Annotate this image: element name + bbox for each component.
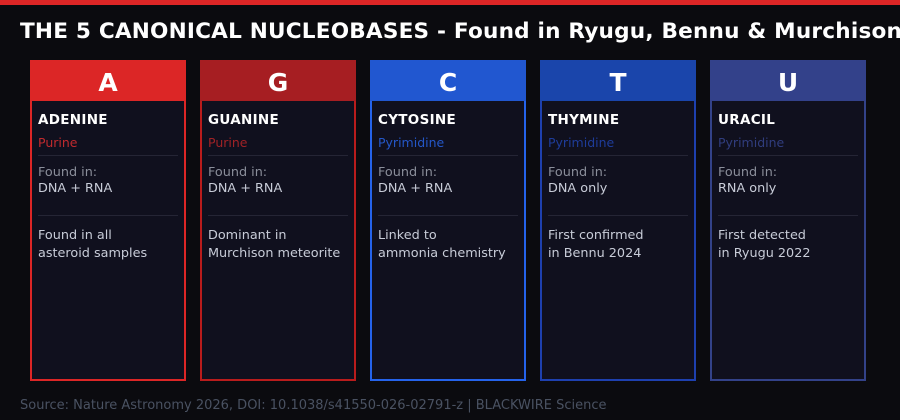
found in: Found in: [378, 165, 437, 180]
header: G [200, 60, 356, 101]
panel: cytosine [370, 60, 526, 381]
header: T: T [609, 68, 627, 97]
note: Found in all [38, 228, 112, 243]
note [378, 228, 506, 261]
header: U: U [778, 68, 798, 97]
found in: Found in: [208, 165, 267, 180]
header: A: A [98, 68, 118, 97]
found in [718, 165, 777, 196]
found in: Found in: [38, 165, 97, 180]
name: URACIL [718, 112, 775, 128]
name: THYMINE [548, 112, 619, 128]
found in: DNA + RNA [378, 181, 452, 196]
name: ADENINE [38, 112, 108, 128]
found in: DNA only [548, 181, 607, 196]
panel: guanine [200, 60, 356, 381]
type: Purine [38, 135, 77, 150]
note [548, 228, 644, 261]
note: ammonia chemistry [378, 246, 506, 261]
note: in Ryugu 2022 [718, 246, 810, 261]
header: U [710, 60, 866, 101]
found in: DNA + RNA [38, 181, 112, 196]
type: Pyrimidine [718, 135, 784, 150]
panel: uracil [710, 60, 866, 381]
header: G: G [268, 68, 288, 97]
note: First confirmed [548, 228, 644, 243]
note [718, 228, 810, 261]
found in [548, 165, 607, 196]
panel: adenine [30, 60, 186, 381]
note: Murchison meteorite [208, 246, 340, 261]
note: in Bennu 2024 [548, 246, 641, 261]
found in: Found in: [718, 165, 777, 180]
header: C [370, 60, 526, 101]
found in: Found in: [548, 165, 607, 180]
panel: thymine [540, 60, 696, 381]
note: First detected [718, 228, 806, 243]
found in: DNA + RNA [208, 181, 282, 196]
note: Dominant in [208, 228, 287, 243]
found in: RNA only [718, 181, 776, 196]
note [208, 228, 340, 261]
found in [208, 165, 282, 196]
found in [38, 165, 112, 196]
name: CYTOSINE [378, 112, 456, 128]
type: Pyrimidine [548, 135, 614, 150]
header: T [540, 60, 696, 101]
header: C: C [439, 68, 457, 97]
name: GUANINE [208, 112, 279, 128]
type: Purine [208, 135, 247, 150]
note [38, 228, 147, 261]
header: A [30, 60, 186, 101]
found in [378, 165, 452, 196]
note: Linked to [378, 228, 437, 243]
note: asteroid samples [38, 246, 147, 261]
source footer: Source: Nature Astronomy 2026, DOI: 10.1038/s41550-026-02791-z | BLACKWIRE Science [20, 398, 606, 413]
type: Pyrimidine [378, 135, 444, 150]
title: THE 5 CANONICAL NUCLEOBASES - Found in Ryugu, Bennu & Murchison [20, 19, 900, 44]
